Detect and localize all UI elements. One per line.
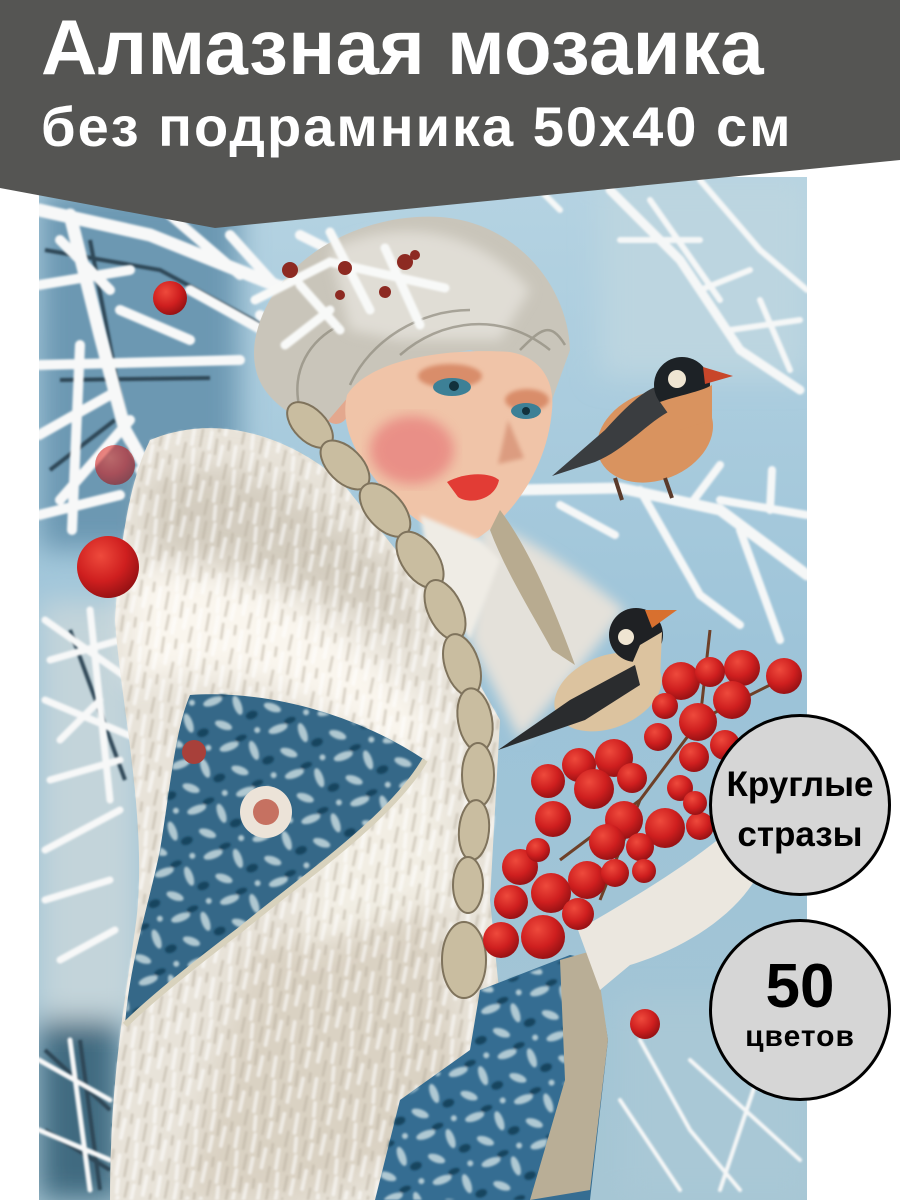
fur collar right [470, 520, 625, 740]
blue ornamented sleeve panel [125, 694, 425, 1025]
eye sockets [418, 364, 549, 411]
sleeve trim [530, 950, 608, 1200]
lips [447, 474, 499, 501]
hair highlight [330, 231, 530, 340]
background sky [39, 177, 807, 1200]
frost crown on hair [255, 232, 445, 345]
face [345, 351, 552, 540]
coat shape white fur [110, 428, 500, 1200]
ornament flower [182, 740, 292, 838]
badge: round rhinestones [709, 714, 891, 896]
white glove [578, 838, 755, 990]
berries in hair [282, 250, 420, 300]
nose shade [498, 420, 524, 464]
header banner [0, 0, 900, 228]
badge: 50 colours: 50 [766, 952, 834, 1021]
braid [279, 394, 497, 998]
left frosted foliage [39, 177, 810, 1200]
hair [254, 217, 570, 430]
blush [370, 416, 454, 484]
fur texture [110, 428, 500, 1200]
rowan berries [77, 281, 802, 1039]
title: Алмазная мозаика [41, 3, 764, 91]
frosted branches left [39, 202, 329, 1194]
badge: round rhinestones: Круглые [726, 765, 874, 804]
fur at neck [420, 515, 500, 640]
floral pattern on sleeve [375, 960, 565, 1200]
bird lower [498, 608, 677, 750]
lower blue sleeve [375, 955, 608, 1200]
bird upper [552, 357, 733, 500]
painting: winter girl with birds and rowan berries [39, 177, 807, 1200]
right braid [490, 510, 575, 665]
ear [328, 400, 346, 424]
dark twigs [43, 238, 260, 1192]
frosted branches right [515, 180, 807, 1190]
hair strands [297, 310, 565, 410]
berries cluster stems [560, 630, 780, 900]
panel trim [125, 760, 425, 1025]
floral pattern on panel [125, 694, 425, 1025]
fur shading [130, 469, 470, 1200]
badge: round rhinestones: стразы [737, 815, 863, 854]
badge: 50 colours [709, 919, 891, 1101]
badge: 50 colours: цветов [745, 1020, 855, 1053]
subtitle: без подрамника 50х40 см [41, 95, 793, 158]
eyes [433, 378, 541, 419]
